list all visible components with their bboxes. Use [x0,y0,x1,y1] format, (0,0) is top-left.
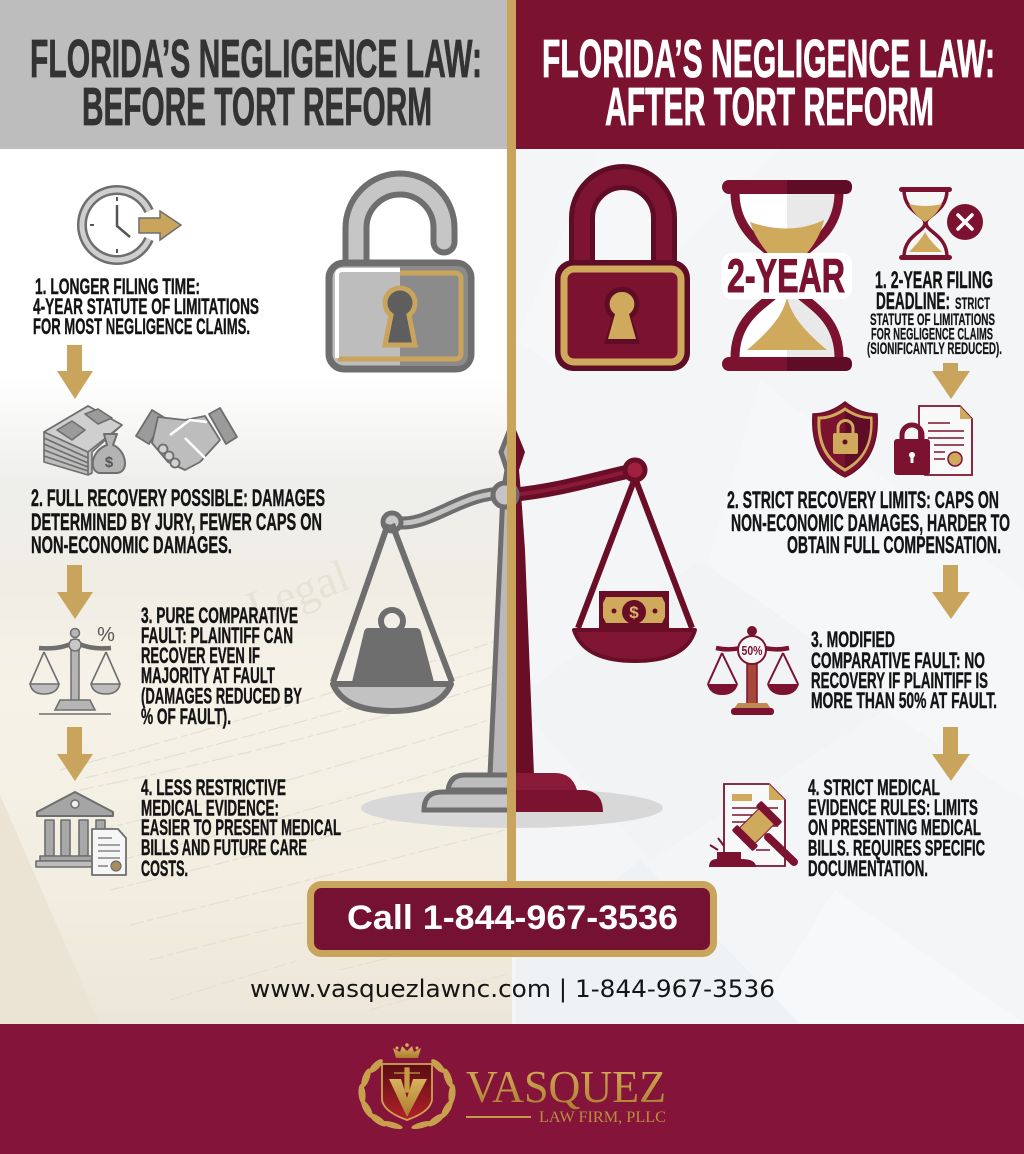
text: before item 1: FOR MOST NEGLIGENCE CLAIMS. [33,314,250,339]
text: before item 3: FAULT: PLAINTIFF CAN [141,623,293,648]
header left: before tort reform: BEFORE TORT REFORM [82,77,432,137]
arrow: before 1 to 2 [57,345,93,399]
text: before item 2: NON-ECONOMIC DAMAGES. [31,532,232,559]
text: after item 1 [867,267,1002,358]
icon: document with lock [894,406,972,475]
header left: before tort reform [0,0,507,149]
text: after item 1: STRICT [955,295,990,313]
left background: parchment: Legal [240,550,356,633]
text: after item 3: 3. MODIFIED [811,627,895,652]
right pan with banknote: $ [629,603,639,622]
2-year label halo [722,253,852,299]
text: before item 4: COSTS. [141,856,188,881]
text: before item 4: BILLS AND FUTURE CARE [141,835,307,860]
icon: cash stack and money bag: $ [105,454,114,471]
text: before item 3: (DAMAGES REDUCED BY [141,684,302,708]
text: after item 1: DEADLINE: [876,288,950,315]
text: before item 4: 4. LESS RESTRICTIVE [141,775,286,800]
icon: small scale with 50 percent [707,626,799,715]
text: after item 4: DOCUMENTATION. [808,856,928,881]
icon: cash stack and money bag [44,406,125,475]
right pan with banknote [574,478,695,661]
right background: geometric light panel [512,149,1024,1024]
text: before item 3: 3. PURE COMPARATIVE [141,603,298,628]
icon: small scale with 50 percent: 50% [742,643,763,658]
text: before item 4: MEDICAL EVIDENCE: [141,796,279,820]
text: before item 2: DETERMINED BY JURY, FEWER CAPS ON [31,509,322,536]
text: before item 3 [141,603,302,729]
icon: shield with lock [813,402,877,477]
icon: courthouse with document [36,792,126,875]
2-year label: 2-YEAR [727,249,845,302]
text: before item 1 [33,274,259,339]
icon: small scale with percent [30,624,120,714]
logo tagline: LAW FIRM, PLLC [539,1109,666,1126]
icon: document with gavel [709,784,794,867]
text: after item 4 [808,775,985,881]
text: before item 4 [141,775,341,881]
arrow: before 3 to 4 [57,727,93,781]
icon: clock with arrow [82,190,181,260]
text: before item 3: RECOVER EVEN IF [141,643,260,668]
icon: small scale with percent: % [97,624,115,646]
text: after item 3 [811,627,997,713]
arrow: after 2 to 3 [932,565,970,619]
icon: small hourglass with x [899,187,983,260]
text: before item 1: 4-YEAR STATUTE OF LIMITATIONS [33,294,259,319]
logo emblem: crown, shield and laurels [358,1043,456,1131]
center gold divider [507,0,516,885]
text: before item 1: 1. LONGER FILING TIME: [35,274,200,299]
text: before item 3: % OF FAULT). [141,704,231,729]
logo: Vasquez Law Firm [358,1043,666,1131]
icon: open padlock [329,184,471,369]
footer band [0,1024,1024,1154]
website and phone line: www.vasquezlawnc.com | 1-844-967-3536 [250,975,775,1003]
text: after item 2 [727,487,1010,559]
icon: handshake [136,408,237,470]
text: after item 4: 4. STRICT MEDICAL [808,775,940,800]
text: before item 2: 2. FULL RECOVERY POSSIBLE: DAMAGES [31,485,325,512]
call button: Call 1-844-967-3536 [347,899,678,937]
icon: large hourglass with 2-year label [722,180,852,371]
header left: before tort reform: FLORIDA’S NEGLIGENCE LAW: [30,29,482,89]
left background: parchment [0,149,512,1024]
icon: closed padlock [555,177,690,371]
text: before item 2 [31,485,325,559]
header right: after tort reform [516,0,1024,149]
arrow: after 3 to 4 [932,727,970,781]
left pan with weight [333,524,452,711]
arrow: after 1 to 2 [932,363,970,399]
text: before item 3: MAJORITY AT FAULT [141,663,275,688]
text: before item 4: EASIER TO PRESENT MEDICAL [141,815,341,840]
large balance scale [333,420,695,828]
arrow: before 2 to 3 [57,565,93,619]
call button [310,884,714,954]
logo wordmark: VASQUEZ [466,1061,666,1112]
